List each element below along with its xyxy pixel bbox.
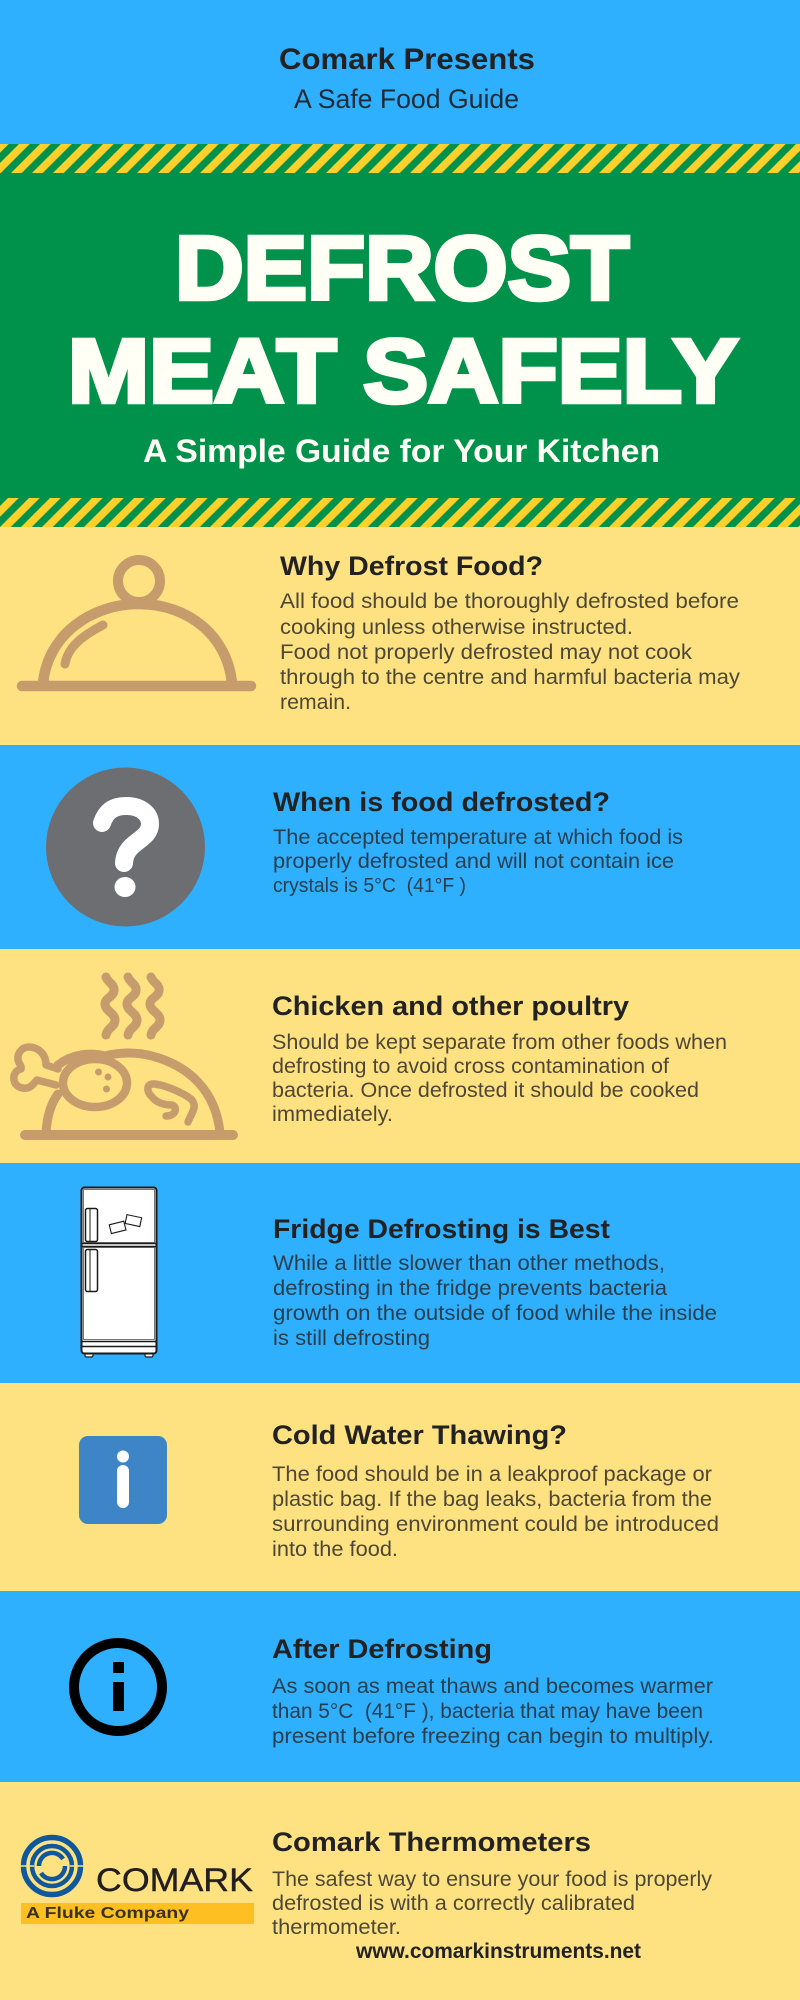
logo wordmark: COMARK [96,1862,253,1898]
logo mark [20,1838,84,1894]
body text [273,826,683,897]
body text: The accepted temperature at which food is [273,826,683,849]
body text: than 5°C (41°F ), bacteria that may have been [272,1700,703,1723]
panel: after defrosting [0,1591,800,1782]
panel: why defrost food [0,527,800,745]
body text: bacteria. Once defrosted it should be cooked [272,1079,699,1102]
body text: plastic bag. If the bag leaks, bacteria from the [272,1488,712,1511]
body text: properly defrosted and will not contain ice [273,850,674,873]
body text: defrosted is with a correctly calibrated [272,1892,635,1915]
panel: chicken and other poultry [0,949,800,1163]
body text: growth on the outside of food while the inside [273,1302,717,1325]
icon: roast chicken with steam [14,977,233,1135]
heading: Comark Thermometers [272,1827,591,1857]
body text [280,590,741,714]
heading: After Defrosting [272,1634,492,1664]
body text: The food should be in a leakproof package or [272,1463,712,1486]
heading: When is food defrosted? [273,787,610,817]
body text: present before freezing can begin to multiply. [272,1725,714,1748]
top hazard stripe [0,144,800,173]
body text: The safest way to ensure your food is properly [272,1868,713,1891]
icon: serving cloche [22,560,251,686]
header panel [0,0,800,144]
panel: fridge defrosting [0,1163,800,1383]
header subtitle: A Safe Food Guide [294,84,519,114]
heading: Chicken and other poultry [272,991,629,1021]
body text: cooking unless otherwise instructed. [280,616,633,639]
logo tagline: A Fluke Company [26,1905,189,1922]
icon: fridge [82,1188,156,1357]
logo tagline bar [21,1903,254,1924]
panel: when is food defrosted [0,745,800,949]
main title line 1: DEFROST [175,219,629,319]
body text: As soon as meat thaws and becomes warmer [272,1675,713,1698]
body text: surrounding environment could be introduced [272,1513,719,1536]
bottom hazard stripe [0,498,800,527]
body text: defrosting to avoid cross contamination of [272,1055,669,1078]
body text: All food should be thoroughly defrosted before [280,590,739,613]
body text: While a little slower than other methods, [273,1252,665,1275]
heading: Fridge Defrosting is Best [273,1214,610,1244]
body text: immediately. [272,1103,393,1126]
body text: crystals is 5°C (41°F ) [273,875,466,897]
body text: Food not properly defrosted may not cook [280,641,693,664]
body text [272,1031,727,1126]
title banner [0,144,800,527]
body text: Should be kept separate from other foods when [272,1031,727,1054]
body text: into the food. [272,1538,398,1561]
body text: defrosting in the fridge prevents bacteria [273,1277,667,1300]
icon: question mark [46,768,205,926]
body text: thermometer. [272,1916,401,1939]
body text: is still defrosting [273,1327,430,1350]
body text [272,1868,713,1939]
icon: info square [79,1436,167,1524]
logo: Comark [20,1838,254,1924]
body text [272,1463,719,1561]
panel: comark thermometers [0,1782,800,2000]
header title: Comark Presents [279,43,535,76]
main title line 2: MEAT SAFELY [68,322,738,422]
heading: Cold Water Thawing? [272,1420,567,1450]
banner subtitle: A Simple Guide for Your Kitchen [143,433,660,469]
body text: remain. [280,691,351,714]
body text: through to the centre and harmful bacteria may [280,666,741,689]
heading: Why Defrost Food? [280,551,543,581]
body text [273,1252,717,1350]
website url: www.comarkinstruments.net [355,1940,641,1963]
body text [272,1675,714,1748]
panel: cold water thawing [0,1383,800,1591]
icon: info circle [74,1643,162,1731]
